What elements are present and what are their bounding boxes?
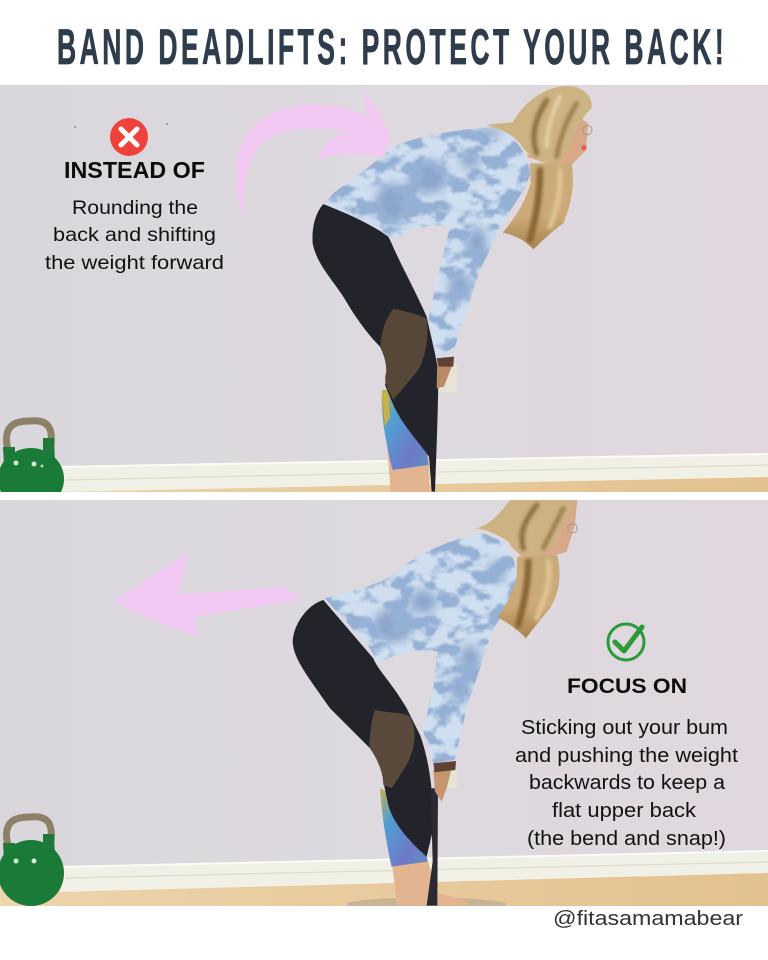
baseboard xyxy=(60,453,768,492)
shirt xyxy=(323,127,530,358)
calf xyxy=(382,390,428,470)
calf xyxy=(380,788,427,867)
shadow xyxy=(346,898,506,906)
baseboard xyxy=(60,850,768,892)
text: instead of description xyxy=(45,197,224,274)
text: instead of description: back and shifting xyxy=(53,224,216,246)
heading: instead of: INSTEAD OF xyxy=(64,157,205,183)
shirt xyxy=(325,533,517,763)
mesh panel xyxy=(369,710,415,788)
hair xyxy=(477,500,575,638)
resistance band xyxy=(427,788,438,906)
text: focus on description: backwards to keep a xyxy=(529,772,726,794)
mesh panel xyxy=(381,309,428,400)
leggings xyxy=(312,204,438,492)
text: focus on description: Sticking out your bum xyxy=(521,717,728,739)
outlet xyxy=(438,364,456,392)
face xyxy=(510,500,577,558)
hand xyxy=(437,357,454,388)
person: rounded back xyxy=(312,86,592,493)
floor xyxy=(0,477,768,492)
arrow: straight pink xyxy=(114,553,298,636)
face xyxy=(526,120,588,165)
social handle: @fitasamamabear xyxy=(553,908,743,930)
text: focus on description: and pushing the weight xyxy=(515,745,738,767)
inner arm xyxy=(430,225,465,320)
icon: kettlebell xyxy=(0,417,64,492)
text: instead of description: Rounding the xyxy=(72,197,198,219)
floor xyxy=(0,873,768,906)
leggings xyxy=(293,600,433,857)
outlet xyxy=(447,770,457,788)
icon: x mark xyxy=(110,118,148,156)
panel: instead of photo xyxy=(0,85,768,510)
text: focus on description: flat upper back xyxy=(552,800,697,822)
text: focus on description: (the bend and snap!) xyxy=(527,828,726,850)
hand xyxy=(433,768,452,802)
text: focus on description xyxy=(515,717,738,850)
person: flat back xyxy=(293,500,577,911)
panel: focus on photo xyxy=(0,500,768,911)
hair xyxy=(487,86,592,249)
heading: focus on: FOCUS ON xyxy=(567,674,687,698)
lower leg xyxy=(387,447,430,493)
inner arm xyxy=(426,652,438,712)
icon: kettlebell xyxy=(0,817,64,906)
text: instead of description: the weight forward xyxy=(45,252,224,274)
icon: check xyxy=(608,624,644,660)
lower leg and foot xyxy=(392,858,470,906)
arrow: curved pink xyxy=(236,90,390,217)
title: BAND DEADLIFTS: PROTECT YOUR BACK! xyxy=(57,20,724,75)
